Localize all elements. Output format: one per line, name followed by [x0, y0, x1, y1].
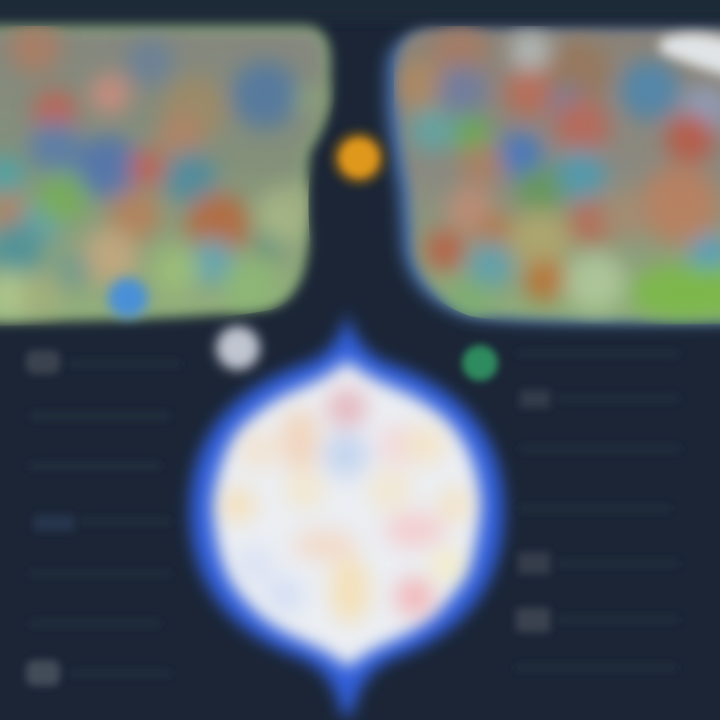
pastel spots [220, 388, 473, 624]
panel: right map [386, 25, 720, 323]
white disc [214, 360, 480, 668]
icon: blue marker [108, 278, 148, 318]
blue halo [190, 312, 504, 716]
top band [0, 0, 720, 20]
panel: central circle [190, 312, 504, 716]
panel: left map [0, 22, 328, 320]
icon: white dot [216, 326, 260, 370]
icon: orange dot [331, 130, 387, 186]
text block: left column [26, 350, 180, 686]
text block: right column [516, 350, 680, 671]
icon: green dot [462, 345, 498, 381]
icon: white cloud [660, 33, 720, 78]
